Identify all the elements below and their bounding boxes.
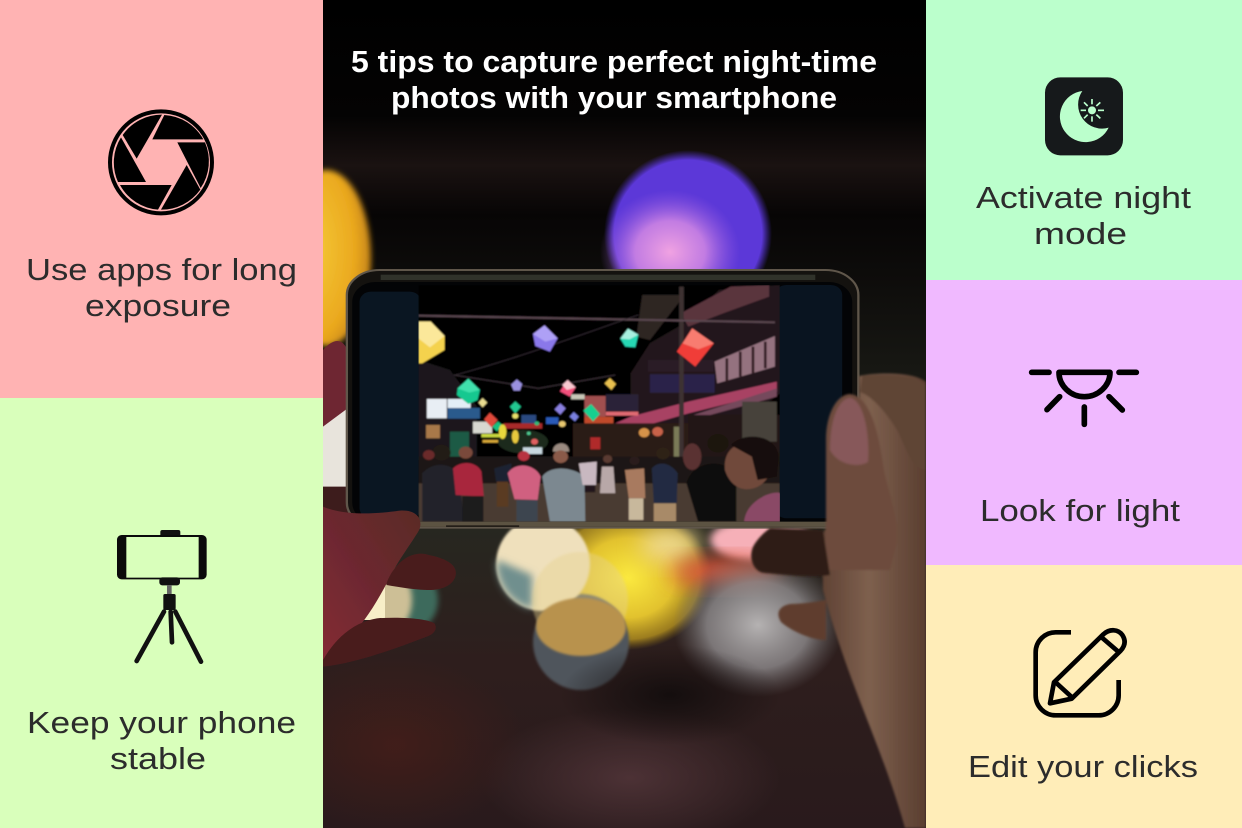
label: keep stable xyxy=(27,705,296,776)
panel: keep your phone stable xyxy=(0,398,323,828)
label: night mode xyxy=(976,180,1191,251)
title xyxy=(351,44,877,115)
hand: left hand behind phone xyxy=(323,341,348,512)
panel: edit your clicks xyxy=(926,565,1242,828)
label: night mode: mode xyxy=(1034,216,1127,251)
hand: left hand fingers xyxy=(323,507,456,667)
label: edit your clicks: Edit your clicks xyxy=(968,749,1198,784)
title: photos with your smartphone xyxy=(391,80,837,115)
label: use apps: exposure xyxy=(85,288,231,323)
cube lanterns xyxy=(418,322,714,454)
label: keep stable: Keep your phone xyxy=(27,705,296,740)
panel: center photo of phone held at night xyxy=(323,50,926,828)
phone front xyxy=(352,282,852,523)
label: use apps xyxy=(26,252,297,323)
icon: camera aperture xyxy=(110,111,212,213)
phone xyxy=(347,270,858,528)
label: use apps: Use apps for long xyxy=(26,252,297,287)
label: look for light: Look for light xyxy=(980,493,1180,528)
side bezel panels xyxy=(360,285,842,518)
buildings right xyxy=(573,285,780,462)
right hand lower fingers xyxy=(751,528,830,640)
wires xyxy=(418,315,775,388)
icon: night mode moon xyxy=(1045,77,1123,155)
panel: look for light xyxy=(926,280,1242,565)
panel: activate night mode xyxy=(926,0,1242,280)
label: night mode: Activate night xyxy=(976,180,1191,215)
icon: lamp with rays xyxy=(1032,372,1136,424)
buildings left xyxy=(418,360,585,460)
screen: night market street xyxy=(418,285,781,523)
bokeh background lights xyxy=(265,150,904,828)
label: keep stable: stable xyxy=(110,741,206,776)
icon: edit pencil xyxy=(1036,630,1125,715)
phone case xyxy=(347,270,858,528)
panel: use apps for long exposure xyxy=(0,0,323,398)
icon: phone on tripod xyxy=(117,530,207,662)
crowd xyxy=(418,434,781,523)
hand: right hand gripping phone xyxy=(751,374,926,828)
title: 5 tips to capture perfect night-time xyxy=(351,44,877,79)
